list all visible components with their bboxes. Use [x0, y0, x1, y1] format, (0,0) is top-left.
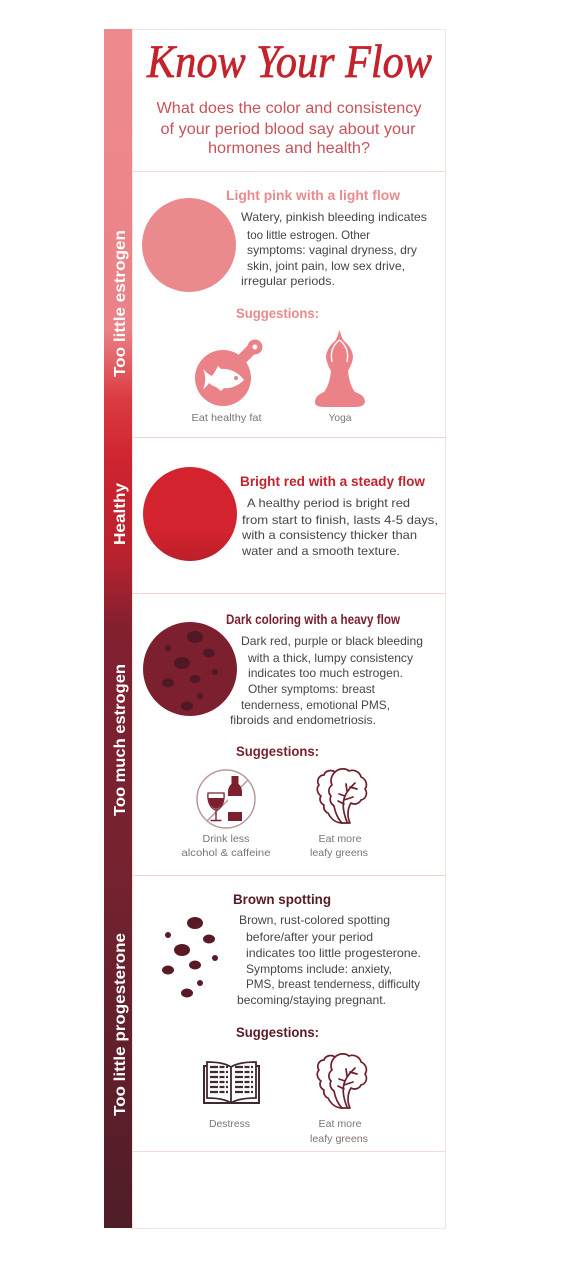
- label: eat more leafy greens: [310, 833, 368, 859]
- heading: Brown spotting: [233, 892, 331, 907]
- side label: too much estrogen: Too much estrogen: [112, 664, 129, 816]
- description: with a thick, lumpy consistency: [247, 651, 413, 665]
- label: yoga: Yoga: [328, 412, 352, 424]
- gradient side bar: [104, 29, 132, 1228]
- suggestions heading: Suggestions:: [236, 305, 319, 321]
- label: eat more leafy greens: Eat more: [318, 833, 362, 845]
- description: fibroids and endometriosis.: [230, 713, 376, 727]
- subtitle: of your period blood say about your: [160, 121, 416, 138]
- heading: Dark coloring with a heavy flow: [226, 612, 400, 627]
- panel: light pink section: [142, 188, 427, 424]
- brown spots: [162, 917, 218, 998]
- description: Symptoms include: anxiety,: [246, 962, 392, 976]
- subtitle: [156, 100, 422, 157]
- label: destress: Destress: [209, 1118, 250, 1130]
- icon: leafy greens: [317, 769, 366, 823]
- suggestions heading: Suggestions:: [236, 743, 319, 759]
- description: Brown, rust-colored spotting: [239, 913, 390, 927]
- label: eat more leafy greens: [310, 1118, 368, 1145]
- heading: Bright red with a steady flow: [240, 474, 425, 489]
- description: [237, 913, 421, 1007]
- suggestions heading: Suggestions:: [236, 1024, 319, 1040]
- description: [230, 634, 423, 727]
- heading: Light pink with a light flow: [226, 188, 401, 203]
- label: eat more leafy greens: leafy greens: [310, 847, 368, 859]
- description: [241, 496, 438, 558]
- panel: bright red section: [143, 467, 438, 561]
- side label: too little estrogen: Too little estrogen: [112, 230, 129, 377]
- red circle: [143, 467, 237, 561]
- icon: fish in pan: [195, 340, 262, 406]
- pink circle: [142, 198, 236, 292]
- icon: yoga figure: [315, 330, 365, 407]
- description: before/after your period: [246, 930, 373, 944]
- description: Dark red, purple or black bleeding: [241, 634, 423, 648]
- description: Other symptoms: breast: [248, 682, 376, 696]
- icon: open book: [204, 1062, 259, 1103]
- label: eat more leafy greens: Eat more: [318, 1118, 362, 1130]
- dark clotted circle: [143, 622, 237, 716]
- subtitle: What does the color and consistency: [156, 100, 422, 117]
- icon: no alcohol: [197, 770, 255, 828]
- label: drink less: Drink less: [202, 833, 250, 845]
- label: eat more leafy greens: leafy greens: [310, 1133, 368, 1145]
- description: PMS, breast tenderness, difficulty: [246, 977, 420, 991]
- description: becoming/staying pregnant.: [237, 993, 386, 1007]
- side label: too little progesterone: Too little progesterone: [112, 933, 129, 1116]
- label: drink less: [182, 833, 271, 859]
- panel: brown spotting section: [162, 892, 421, 1145]
- description: symptoms: vaginal dryness, dry: [247, 243, 417, 257]
- description: indicates too little progesterone.: [246, 946, 421, 960]
- description: water and a smooth texture.: [241, 544, 400, 558]
- panel: main card: [132, 30, 446, 1228]
- subtitle: hormones and health?: [208, 140, 370, 157]
- description: skin, joint pain, low sex drive,: [247, 259, 405, 273]
- icon: leafy greens: [317, 1054, 366, 1108]
- description: with a consistency thicker than: [241, 528, 417, 542]
- description: from start to finish, lasts 4-5 days,: [242, 513, 438, 527]
- label: drink less: alcohol & caffeine: [182, 847, 271, 859]
- title: Know Your Flow: [146, 36, 432, 88]
- description: [241, 210, 427, 288]
- side label: healthy: Healthy: [112, 483, 129, 545]
- description: A healthy period is bright red: [247, 496, 410, 510]
- description: irregular periods.: [241, 274, 335, 288]
- description: Watery, pinkish bleeding indicates: [241, 210, 427, 224]
- description: tenderness, emotional PMS,: [241, 698, 390, 712]
- panel: dark section: [143, 612, 423, 859]
- description: too little estrogen. Other: [247, 228, 370, 242]
- label: eat healthy fat: Eat healthy fat: [192, 412, 262, 424]
- description: indicates too much estrogen.: [248, 666, 403, 680]
